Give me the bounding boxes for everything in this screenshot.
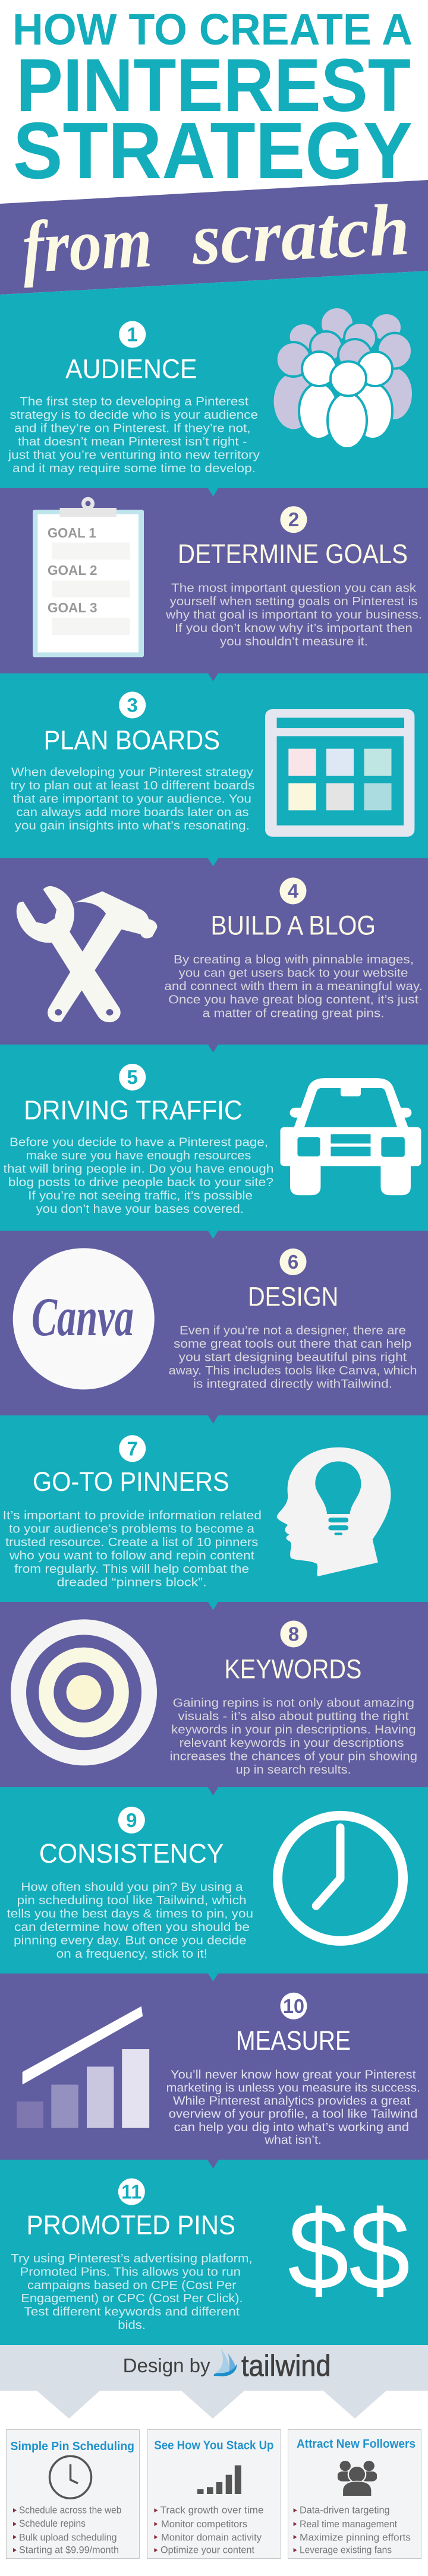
text: consistency body: pinning every day. But once you decide [14, 1934, 247, 1947]
text: blog body: Once you have great blog content, it’s just [168, 993, 418, 1006]
heading: build a blog: BUILD A BLOG [210, 911, 376, 941]
text: promoted body: Try using Pinterest’s advertising platform, [11, 2252, 253, 2265]
text: promoted body: Engagement) or CPC (Cost Per Click). [21, 2292, 243, 2305]
text: pinners body: from regularly. This will help combat the [14, 1563, 249, 1576]
text: pinners body: It’s important to provide information related [3, 1509, 262, 1522]
text: traffic body: blog posts to drive people back to your site? [8, 1176, 273, 1189]
text: measure body: You’ll never know how great your Pinterest [171, 2068, 416, 2081]
text: audience body: and if they’re on Pinterest. If they’re not, [14, 422, 251, 435]
text: audience body: and it may require some time to develop. [12, 462, 256, 475]
list: follower features: Data-driven targeting [300, 2505, 390, 2516]
icon: people group [338, 2461, 377, 2496]
list: follower features [294, 2505, 411, 2555]
heading: plan boards: PLAN BOARDS [44, 725, 220, 755]
badge 8: 8 [288, 1623, 299, 1645]
text: consistency body [7, 1880, 253, 1961]
heading: determine goals: DETERMINE GOALS [178, 539, 408, 569]
icon: clipboard: GOAL 2 [48, 562, 97, 578]
icon: target [11, 1619, 157, 1765]
text: goals body: If you don’t know why it’s important then [175, 622, 413, 635]
text: goals body: why that goal is important to your business. [165, 609, 422, 622]
panel: 1 audience [0, 271, 428, 488]
text: boards body: can always add more boards later on as [17, 806, 248, 819]
title [12, 5, 413, 195]
badge 10: 10 [283, 1995, 304, 2017]
text: promoted body: bids. [118, 2319, 146, 2332]
panel: 4 build a blog [0, 858, 428, 1045]
text: design body: is integrated directly withTailwind. [193, 1377, 392, 1390]
panel: 10 measure [0, 1974, 428, 2160]
text: audience body: strategy is to decide who is your audience [10, 409, 258, 422]
text: measure body: what isn’t. [264, 2134, 322, 2147]
list: analytics features: Optimize your content [160, 2544, 254, 2555]
title: HOW TO CREATE A [12, 5, 413, 54]
heading: go-to pinners: GO-TO PINNERS [33, 1466, 229, 1497]
text: boards body: you gain insights into what’s resonating. [15, 819, 250, 832]
text: boards body: try to plan out at least 10 different boards [11, 779, 254, 792]
text: design body: you start designing beautiful pins right [179, 1351, 407, 1364]
text: blog body: you can get users back to your website [179, 967, 408, 980]
panel: 6 design [0, 1231, 428, 1416]
icon: clipboard: GOAL 3 [48, 600, 97, 615]
icon: dollar signs: $$ [288, 2188, 410, 2313]
icon: canva logo: Canva [32, 1287, 134, 1347]
subtitle banner: from scratch [0, 180, 428, 295]
list: scheduling features: Bulk upload scheduling [19, 2531, 117, 2543]
panel: 7 go-to pinners [0, 1415, 428, 1602]
text: traffic body: that will bring people in. Do you have enough [4, 1162, 274, 1175]
text: keywords body: keywords in your pin descriptions. Having [171, 1724, 416, 1737]
text: traffic body [4, 1136, 274, 1216]
badge 3 [119, 691, 146, 719]
text: boards body: that are important to your audience. You [13, 792, 251, 805]
text: promoted body: Promoted Pins. This allows you to run [20, 2265, 241, 2278]
icon: head with light bulb [277, 1447, 391, 1576]
text: audience body [8, 395, 260, 475]
icon: canva logo [13, 1248, 155, 1389]
text: design body: away. This includes tools like Canva, which [169, 1364, 417, 1377]
badge 7 [119, 1435, 146, 1462]
text: blog body: a matter of creating great pins. [203, 1007, 384, 1020]
icon: clock [50, 2456, 92, 2498]
icon: clipboard: GOAL 1 [48, 525, 96, 541]
text: measure body: marketing is unless you measure its success. [166, 2081, 420, 2094]
heading: measure: MEASURE [236, 2025, 351, 2056]
icon: clipboard [33, 497, 144, 657]
panel: 9 consistency [0, 1787, 428, 1974]
badge 4 [279, 878, 307, 904]
text: goals body [165, 582, 422, 649]
text: keywords body: visuals - it’s also about putting the right [178, 1710, 409, 1723]
footer banner: design by tailwind: Design by [123, 2354, 210, 2376]
text: consistency body: How often should you pin? By using a [21, 1880, 244, 1894]
text: measure body: While Pinterest analytics provides a great [173, 2095, 411, 2108]
text: audience body: just that you’re venturing into new territory [8, 448, 260, 462]
badge 11: 11 [121, 2181, 141, 2202]
list: scheduling features: Starting at $9.99/month [19, 2544, 119, 2555]
card: attract new followers [288, 2429, 421, 2559]
text: blog body [164, 953, 423, 1020]
badge 2 [281, 506, 307, 533]
badge 1 [119, 321, 146, 348]
text: blog body: and connect with them in a meaningful way. [164, 980, 423, 993]
list: follower features: Leverage existing fans [300, 2544, 392, 2555]
text: consistency body: tells you the best days & times to pin, you [7, 1908, 253, 1921]
icon: tailwind sail logo [214, 2348, 237, 2376]
badge 5 [119, 1064, 146, 1091]
panel: 11 promoted pins [0, 2160, 428, 2345]
text: pinners body: who you want to follow and repin content [9, 1549, 254, 1562]
heading: promoted pins: PROMOTED PINS [26, 2210, 235, 2240]
list: follower features: Maximize pinning efforts [300, 2531, 411, 2543]
text: goals body: The most important question you can ask [171, 582, 417, 595]
badge 10 [281, 1993, 307, 2019]
icon: audience crowd [274, 307, 412, 448]
heading: keywords: KEYWORDS [224, 1654, 361, 1684]
icon: wrench and hammer [17, 886, 157, 1022]
text: audience body: that doesn’t mean Pinterest isn’t right - [18, 435, 247, 448]
card: attract new followers: Attract New Followers [297, 2438, 416, 2451]
text: measure body: can help you dig into what’s working and [174, 2121, 409, 2134]
text: design body: Even if you’re not a designer, there are [180, 1325, 406, 1338]
heading: consistency: CONSISTENCY [39, 1838, 224, 1869]
text: keywords body [170, 1696, 417, 1777]
text: design body: some great tools out there that can help [174, 1338, 411, 1351]
card: see how you stack up [147, 2429, 281, 2559]
footer banner: design by tailwind [0, 2345, 428, 2419]
list: scheduling features: Schedule repins [19, 2518, 86, 2529]
list: analytics features: Monitor domain activity [161, 2532, 262, 2543]
list: scheduling features [13, 2505, 121, 2555]
text: promoted body [11, 2252, 253, 2332]
text: traffic body: Before you decide to have a Pinterest page, [10, 1136, 268, 1149]
badge 3: 3 [127, 694, 138, 716]
text: promoted body: Test different keywords and different [24, 2306, 240, 2319]
list: analytics features: Monitor competitors [161, 2518, 247, 2530]
text: keywords body: relevant keywords in your descriptions [180, 1737, 404, 1750]
list: analytics features [154, 2505, 264, 2555]
title: PINTEREST [16, 43, 411, 127]
icon: clock [278, 1816, 403, 1941]
card: see how you stack up: See How You Stack Up [154, 2439, 273, 2452]
subtitle banner: from scratch: from [20, 201, 154, 288]
panel: 5 driving traffic [0, 1045, 428, 1231]
list: follower features: Real time management [300, 2518, 397, 2530]
text: pinners body: dreaded “pinners block”. [57, 1576, 207, 1589]
panel: 2 determine goals [0, 488, 428, 674]
text: pinners body: to your audience’s problems to become a [9, 1523, 255, 1536]
text: consistency body: on a frequency, stick to it! [56, 1948, 207, 1961]
text: pinners body [3, 1509, 262, 1589]
text: traffic body: you don’t have your bases covered. [36, 1203, 244, 1216]
text: keywords body: increases the chances of your pin showing [170, 1750, 417, 1763]
badge 1: 1 [127, 323, 138, 346]
icon: car [280, 1078, 421, 1195]
text: traffic body: If you’re not seeing traffic, it’s possible [28, 1189, 253, 1202]
badge 9: 9 [126, 1809, 137, 1831]
text: measure body: overview of your profile, a tool like Tailwind [169, 2108, 417, 2121]
text: boards body [11, 766, 254, 832]
heading: design: DESIGN [248, 1281, 338, 1311]
badge 6: 6 [288, 1251, 298, 1273]
badge 11 [118, 2179, 145, 2205]
text: pinners body: trusted resource. Create a list of 10 pinners [5, 1536, 258, 1549]
text: consistency body: can determine how often you should be [14, 1921, 250, 1934]
text: traffic body: make sure you have enough resources [26, 1149, 251, 1162]
badge 7: 7 [127, 1437, 138, 1459]
heading: driving traffic: DRIVING TRAFFIC [24, 1095, 243, 1125]
text: audience body: The first step to developing a Pinterest [20, 395, 248, 408]
text: boards body: When developing your Pinterest strategy [11, 766, 253, 779]
badge 9 [118, 1807, 145, 1834]
text: goals body: yourself when setting goals on Pinterest is [170, 595, 418, 608]
icon: growth chart [17, 2006, 149, 2128]
badge 4: 4 [288, 880, 299, 902]
badge 8 [281, 1620, 307, 1648]
text: keywords body: up in search results. [236, 1763, 351, 1777]
panel: 3 plan boards [0, 674, 428, 859]
icon: signal bars [197, 2466, 241, 2494]
footer banner: design by tailwind: tailwind [241, 2349, 331, 2382]
card: simple pin scheduling [6, 2429, 139, 2559]
badge 5: 5 [127, 1066, 138, 1088]
list: scheduling features: Schedule across the web [19, 2505, 121, 2516]
text: consistency body: pin scheduling tool like Tailwind, which [17, 1894, 247, 1907]
icon: board window [265, 709, 414, 837]
panel: 8 keywords [0, 1602, 428, 1787]
list: analytics features: Track growth over time [160, 2505, 264, 2516]
text: blog body: By creating a blog with pinnable images, [174, 953, 414, 966]
text: goals body: you shouldn’t measure it. [220, 636, 368, 649]
text: promoted body: campaigns based on CPE (Cost Per [27, 2279, 237, 2292]
subtitle banner: from scratch: scratch [190, 189, 411, 280]
text: measure body [166, 2068, 420, 2147]
badge 2: 2 [288, 508, 299, 530]
heading: audience: AUDIENCE [65, 354, 197, 384]
text: design body [169, 1325, 417, 1390]
text: keywords body: Gaining repins is not only about amazing [173, 1696, 414, 1709]
badge 6 [279, 1249, 307, 1275]
card: simple pin scheduling: Simple Pin Scheduling [11, 2440, 134, 2453]
